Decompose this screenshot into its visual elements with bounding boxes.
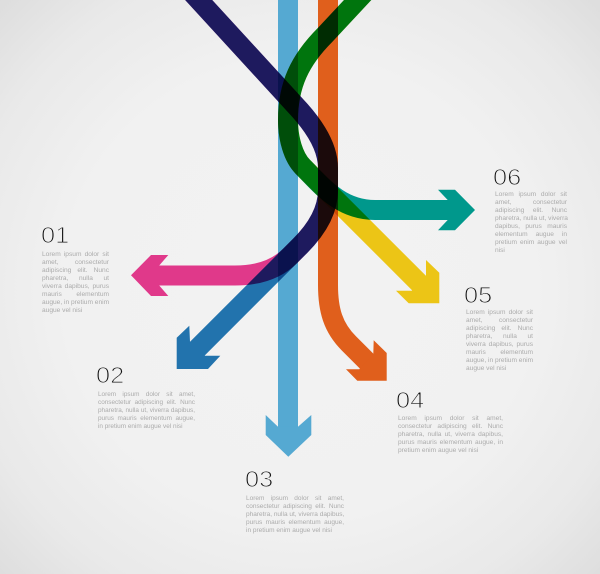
number 02: 02 (96, 362, 124, 388)
block 03 (245, 466, 344, 534)
text 06: amet, consectetur (495, 199, 567, 206)
arrow: yellow 05 (288, 0, 439, 303)
text 06: dapibus, purus mauris (495, 223, 567, 230)
text 04: consectetur adipiscing elit. Nunc (398, 423, 503, 430)
block 06 (493, 164, 568, 254)
text 02: pharetra, nulla ut, viverra dapibus, (98, 407, 195, 414)
text 05: augue vel nisi (466, 365, 506, 372)
block 02 (96, 362, 195, 430)
text 04: Lorem ipsum dolor sit amet, (398, 415, 503, 422)
arrow: orange 04 (328, 0, 387, 381)
text 03: pharetra, nulla ut, viverra dapibus, (246, 511, 344, 518)
arrow: blue 02 (177, 0, 328, 369)
text 01: amet, consectetur (42, 259, 109, 266)
text 02: Lorem ipsum dolor sit amet, (98, 391, 195, 398)
text 06: nisi (495, 247, 505, 254)
text 01: pharetra, nulla ut (42, 275, 109, 282)
text 06 (495, 191, 568, 254)
text 05: Lorem ipsum dolor sit (466, 309, 533, 316)
text 04: pretium enim augue vel nisi (398, 447, 478, 454)
text 03: Lorem ipsum dolor sit amet, (246, 495, 344, 502)
text 05: viverra dapibus, purus (466, 341, 533, 348)
number 04: 04 (396, 387, 424, 413)
text 01: adipiscing elit. Nunc (42, 267, 109, 274)
text 03: purus mauris elementum augue, (246, 519, 344, 526)
text 01: Lorem ipsum dolor sit (42, 251, 109, 258)
number 01: 01 (41, 222, 69, 248)
text 06: adipiscing elit. Nunc (495, 207, 567, 214)
text 06: elementum augue in (495, 231, 567, 238)
text 05: pharetra, nulla ut (466, 333, 533, 340)
block 04 (396, 387, 503, 454)
text 04: purus mauris elementum augue, in (398, 439, 503, 446)
text 03 (246, 495, 344, 534)
number 05: 05 (464, 282, 492, 308)
text 02: purus mauris elementum augue, (98, 415, 195, 422)
text 06: pretium enim augue vel (495, 239, 567, 246)
text 01: augue vel nisi (42, 307, 82, 314)
text 02 (98, 391, 195, 430)
arrow: pink 01 (131, 0, 328, 296)
arrow: light blue 03 (266, 0, 311, 457)
text 04: pharetra, nulla ut, viverra dapibus, (398, 431, 503, 438)
text 05: adipiscing elit. Nunc (466, 325, 533, 332)
text 06: pharetra, nulla ut, viverra (495, 215, 568, 222)
text 03: in pretium enim augue vel nisi (246, 527, 332, 534)
number 03: 03 (245, 466, 273, 492)
text 03: consectetur adipiscing elit. Nunc (246, 503, 344, 510)
text 01: augue, in pretium enim (42, 299, 109, 306)
text 04 (398, 415, 503, 454)
block 05 (464, 282, 533, 372)
text 02: consectetur adipiscing elit. Nunc (98, 399, 195, 406)
text 05 (466, 309, 533, 372)
text 06: Lorem ipsum dolor sit (495, 191, 567, 198)
block 01 (41, 222, 109, 314)
text 02: in pretium enim augue vel nisi (98, 423, 183, 430)
text 01: viverra dapibus, purus (42, 283, 109, 290)
arrow: teal 06 (288, 0, 475, 230)
text 05: amet, consectetur (466, 317, 533, 324)
text 01: mauris elementum (42, 291, 109, 298)
text 01 (42, 251, 109, 314)
text 05: mauris elementum (466, 349, 533, 356)
text 05: augue, in pretium enim (466, 357, 533, 364)
number 06: 06 (493, 164, 521, 190)
